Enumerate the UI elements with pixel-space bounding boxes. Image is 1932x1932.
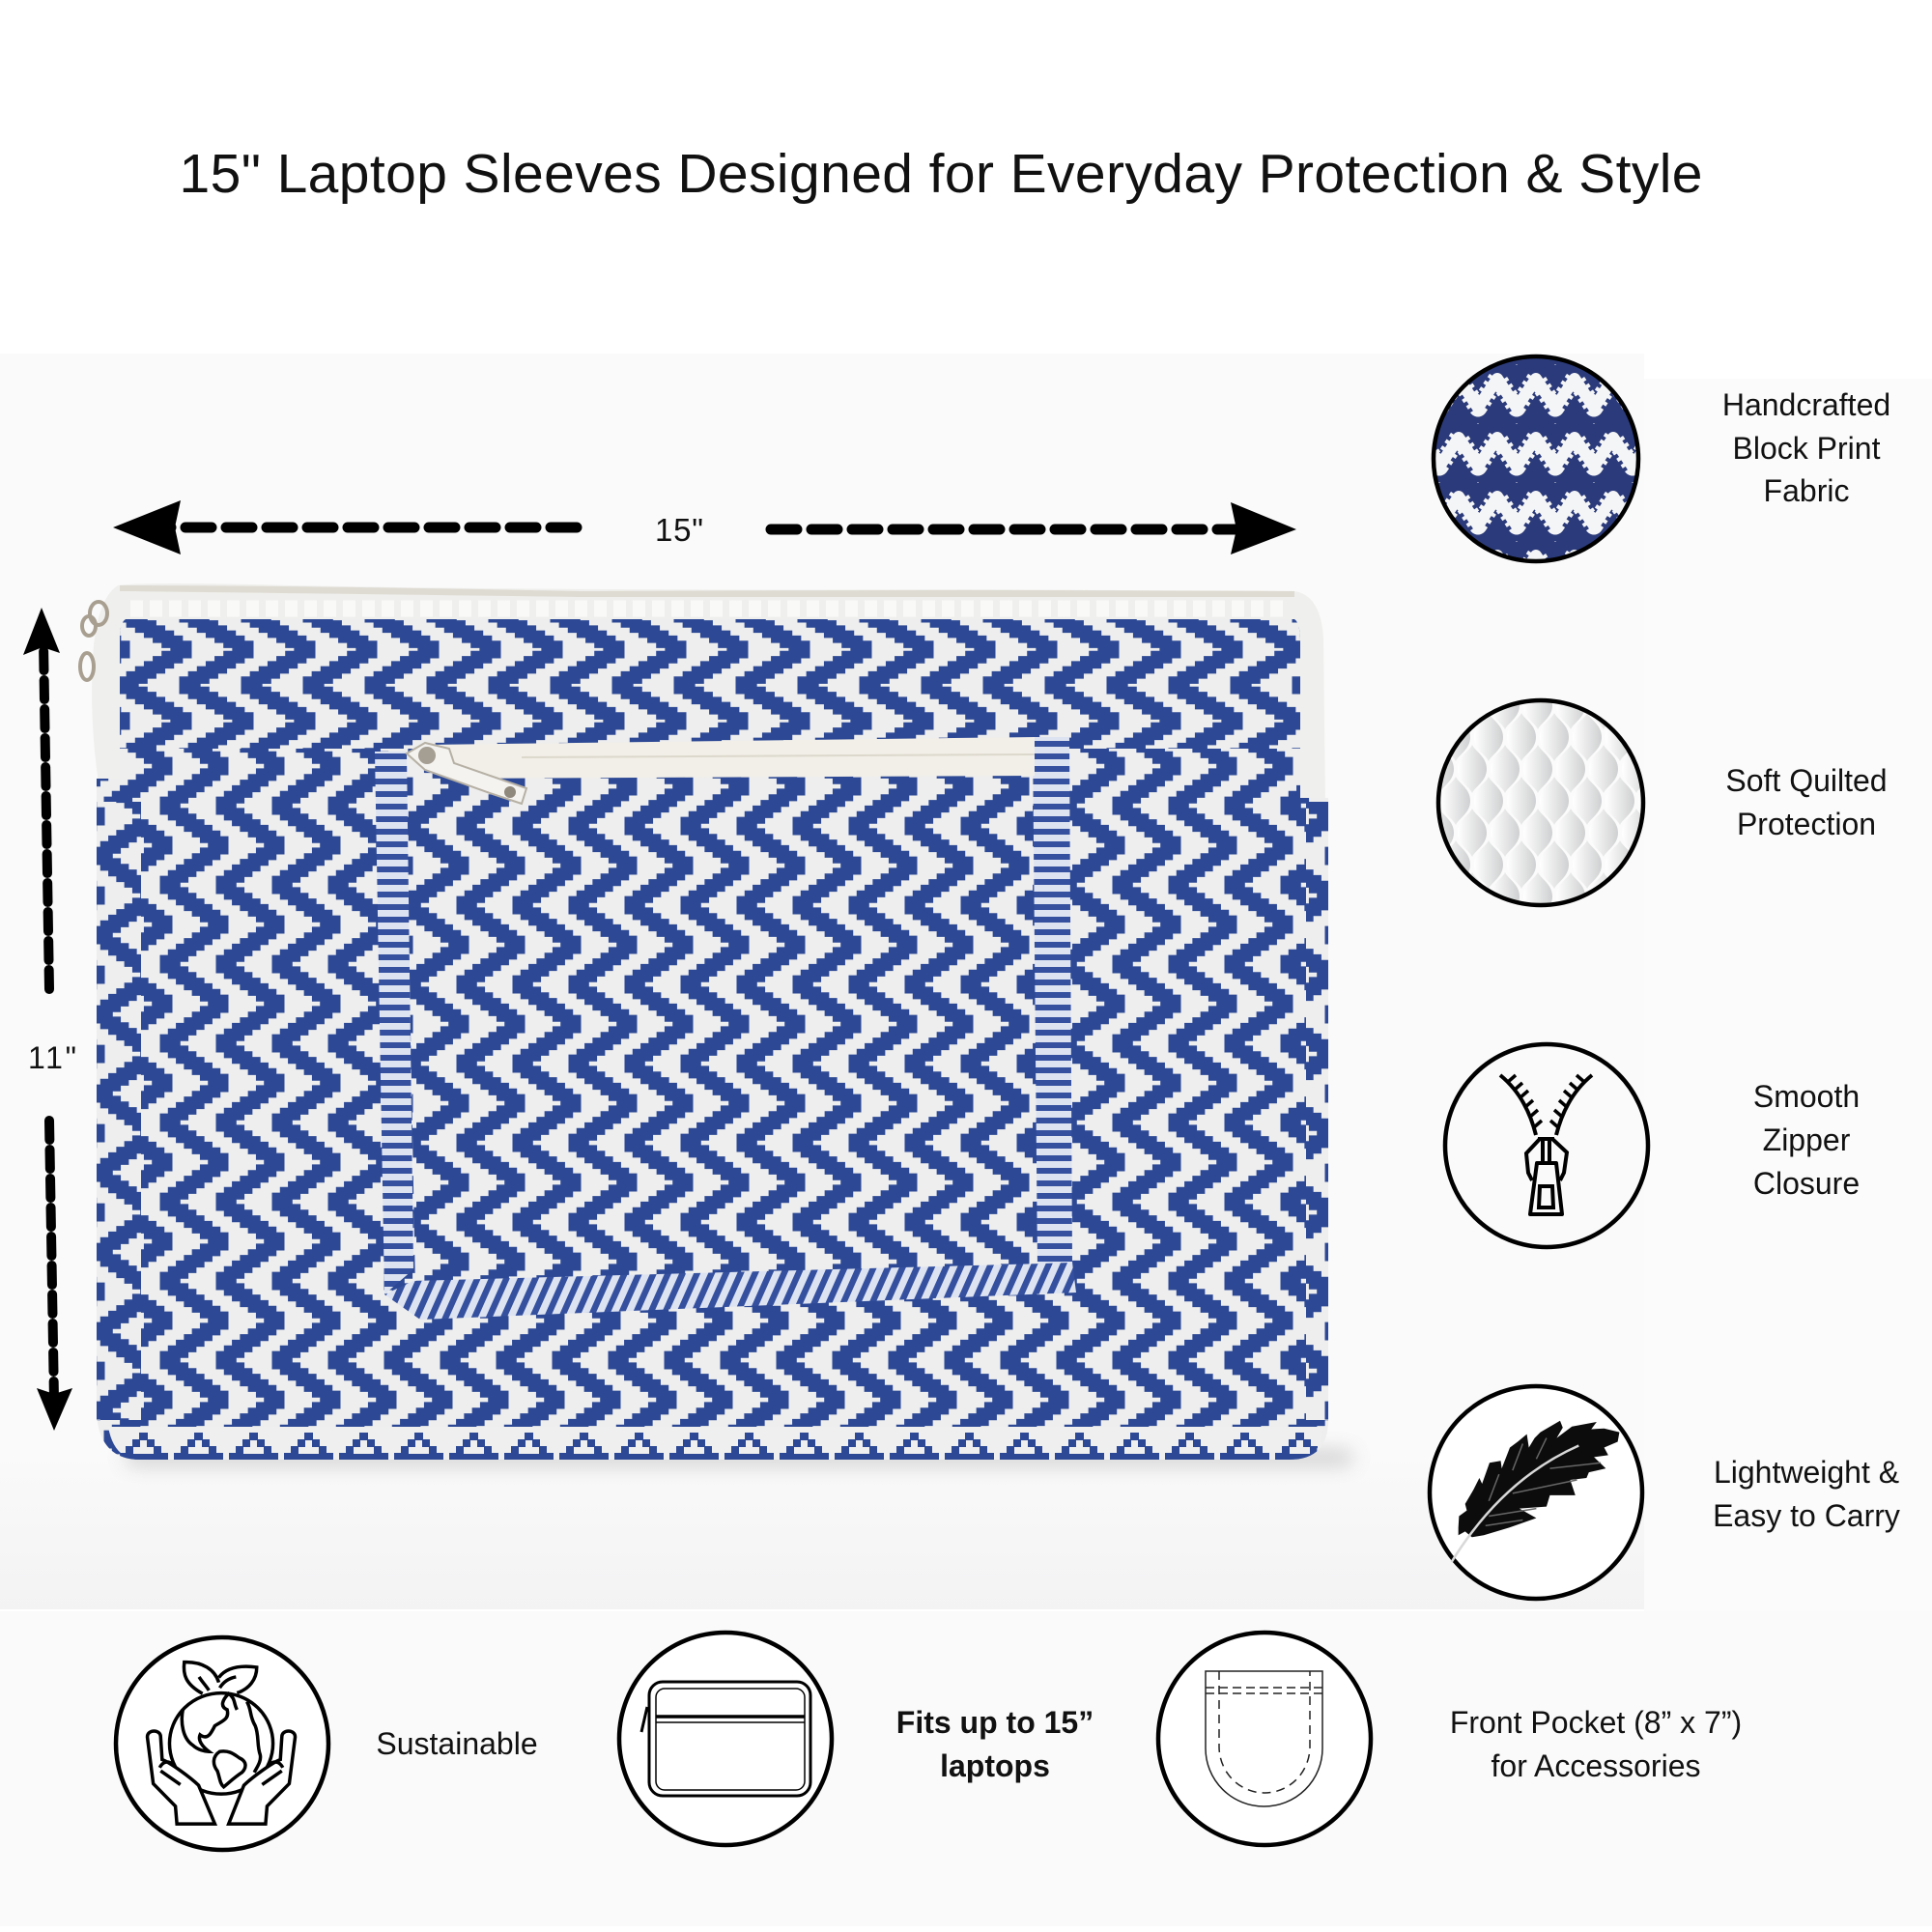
icon: sustainable earth in hands (116, 1637, 328, 1850)
label: zipper closure: Closure (1753, 1166, 1860, 1201)
label: fits laptops: laptops (940, 1748, 1050, 1783)
title: 15" Laptop Sleeves Designed for Everyday Protection & Style (180, 143, 1702, 205)
pocket fabric (406, 773, 1039, 1290)
left side panel (97, 802, 141, 1420)
pocket bottom trim (384, 1263, 1076, 1320)
label: front pocket: Front Pocket (8” x 7”) (1450, 1705, 1742, 1740)
icon: zipper (1445, 1044, 1648, 1247)
zipper band (92, 583, 1325, 807)
label: sustainable: Sustainable (376, 1726, 538, 1761)
arrow: width left (113, 500, 582, 554)
label: zipper closure: Smooth (1753, 1079, 1860, 1114)
dimension label: 11 inches: 11" (28, 1040, 76, 1075)
label: fits laptops: Fits up to 15” (896, 1705, 1094, 1740)
arrow: height up (23, 608, 60, 989)
label: front pocket: for Accessories (1492, 1748, 1700, 1783)
label: lightweight: Lightweight & (1714, 1455, 1899, 1490)
upper fabric (120, 619, 1300, 749)
zipper tape (120, 585, 1294, 597)
dimension label: 15 inches: 15" (655, 512, 703, 548)
icon: feather (1430, 1386, 1642, 1599)
label: quilted protection: Soft Quilted (1725, 763, 1888, 798)
sleeve fabric (97, 619, 1328, 1460)
label: quilted protection: Protection (1737, 807, 1876, 841)
icon: quilted padding swatch (1435, 696, 1647, 909)
label: lightweight: Easy to Carry (1713, 1498, 1900, 1533)
icon: laptop sleeve outline (619, 1633, 832, 1845)
icon: front pocket outline (1158, 1633, 1371, 1845)
label: handcrafted fabric: Block Print (1733, 431, 1881, 466)
zipper puffs (130, 601, 1290, 616)
icon: block print fabric swatch (1430, 353, 1642, 565)
label: zipper closure: Zipper (1763, 1122, 1851, 1157)
main zipper rings (80, 602, 107, 680)
arrow: height down (37, 1121, 72, 1431)
zipper pull (407, 743, 526, 804)
pocket left trim (375, 752, 413, 1294)
bottom hem (108, 1425, 1323, 1460)
arrow: width right (771, 502, 1296, 554)
pocket right trim (1033, 737, 1072, 1267)
sleeve shadow (126, 1451, 1352, 1464)
pocket zipper (425, 737, 1035, 779)
label: handcrafted fabric: Handcrafted (1722, 387, 1890, 422)
right side panel (1306, 802, 1328, 1420)
label: handcrafted fabric: Fabric (1764, 473, 1849, 508)
product photo: laptop sleeve (80, 583, 1352, 1464)
